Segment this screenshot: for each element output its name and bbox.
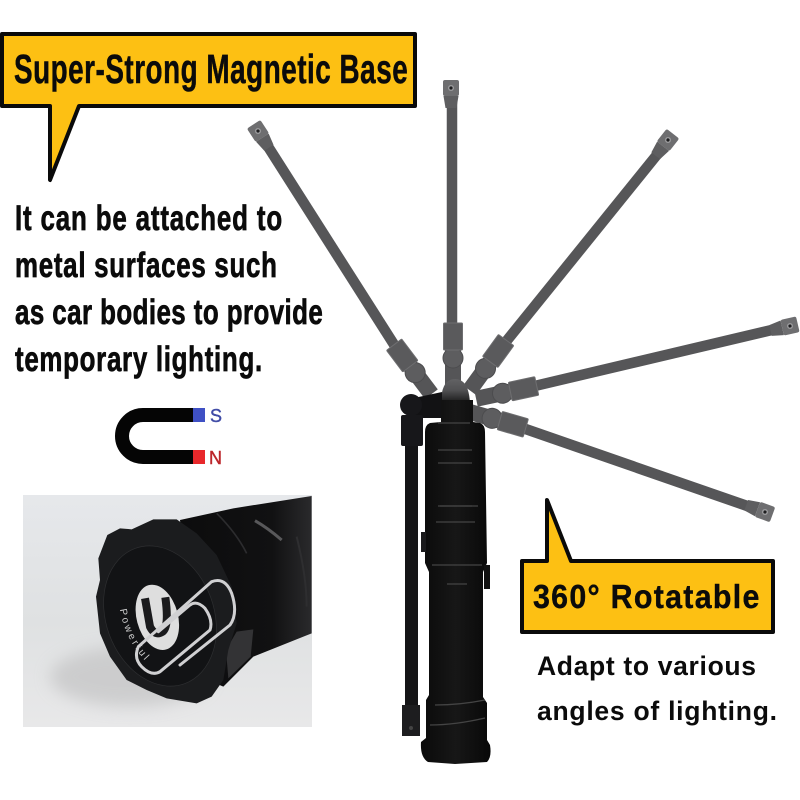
- callout heading: Super-Strong Magnetic Base: [14, 47, 408, 92]
- callout heading: 360° Rotatable: [533, 578, 759, 615]
- arm: upper left: [247, 120, 439, 400]
- arm: lower right: [463, 401, 775, 522]
- icon: horseshoe magnet: N: [209, 448, 222, 468]
- torch cap: [96, 519, 237, 703]
- icon: horseshoe magnet: [122, 406, 222, 468]
- flashlight body: [421, 400, 491, 764]
- magnet logo: [129, 580, 186, 655]
- callout: Super-Strong Magnetic Base: [2, 34, 415, 180]
- torch body: [180, 496, 312, 687]
- arm: right: [474, 316, 800, 409]
- text block: magnetic base description: temporary lighting.: [15, 339, 262, 379]
- text block: magnetic base description: as car bodies to provide: [15, 292, 323, 332]
- side switch: [421, 532, 426, 552]
- magnetic disc: [85, 530, 235, 702]
- body highlights: [430, 423, 485, 725]
- hub: [441, 379, 470, 404]
- paper clip: [136, 581, 235, 673]
- text block: magnetic base description: It can be attached to: [15, 198, 282, 238]
- text block: rotation description: Adapt to various: [537, 651, 756, 681]
- text block: magnetic base description: [15, 198, 323, 379]
- text block: rotation description: [537, 651, 777, 726]
- text block: rotation description: angles of lighting.: [537, 696, 777, 726]
- folded arm: [400, 392, 442, 736]
- callout: 360 Rotatable: [522, 500, 773, 632]
- text block: magnetic base description: metal surfaces such: [15, 245, 277, 285]
- icon: horseshoe magnet: S: [210, 406, 222, 426]
- arm positions fan: [247, 80, 800, 522]
- logo text: Powerful: [120, 608, 150, 660]
- arm: upper right: [462, 129, 679, 396]
- arm: vertical: [443, 80, 463, 385]
- photo: paper clip on magnetic base: [23, 495, 312, 727]
